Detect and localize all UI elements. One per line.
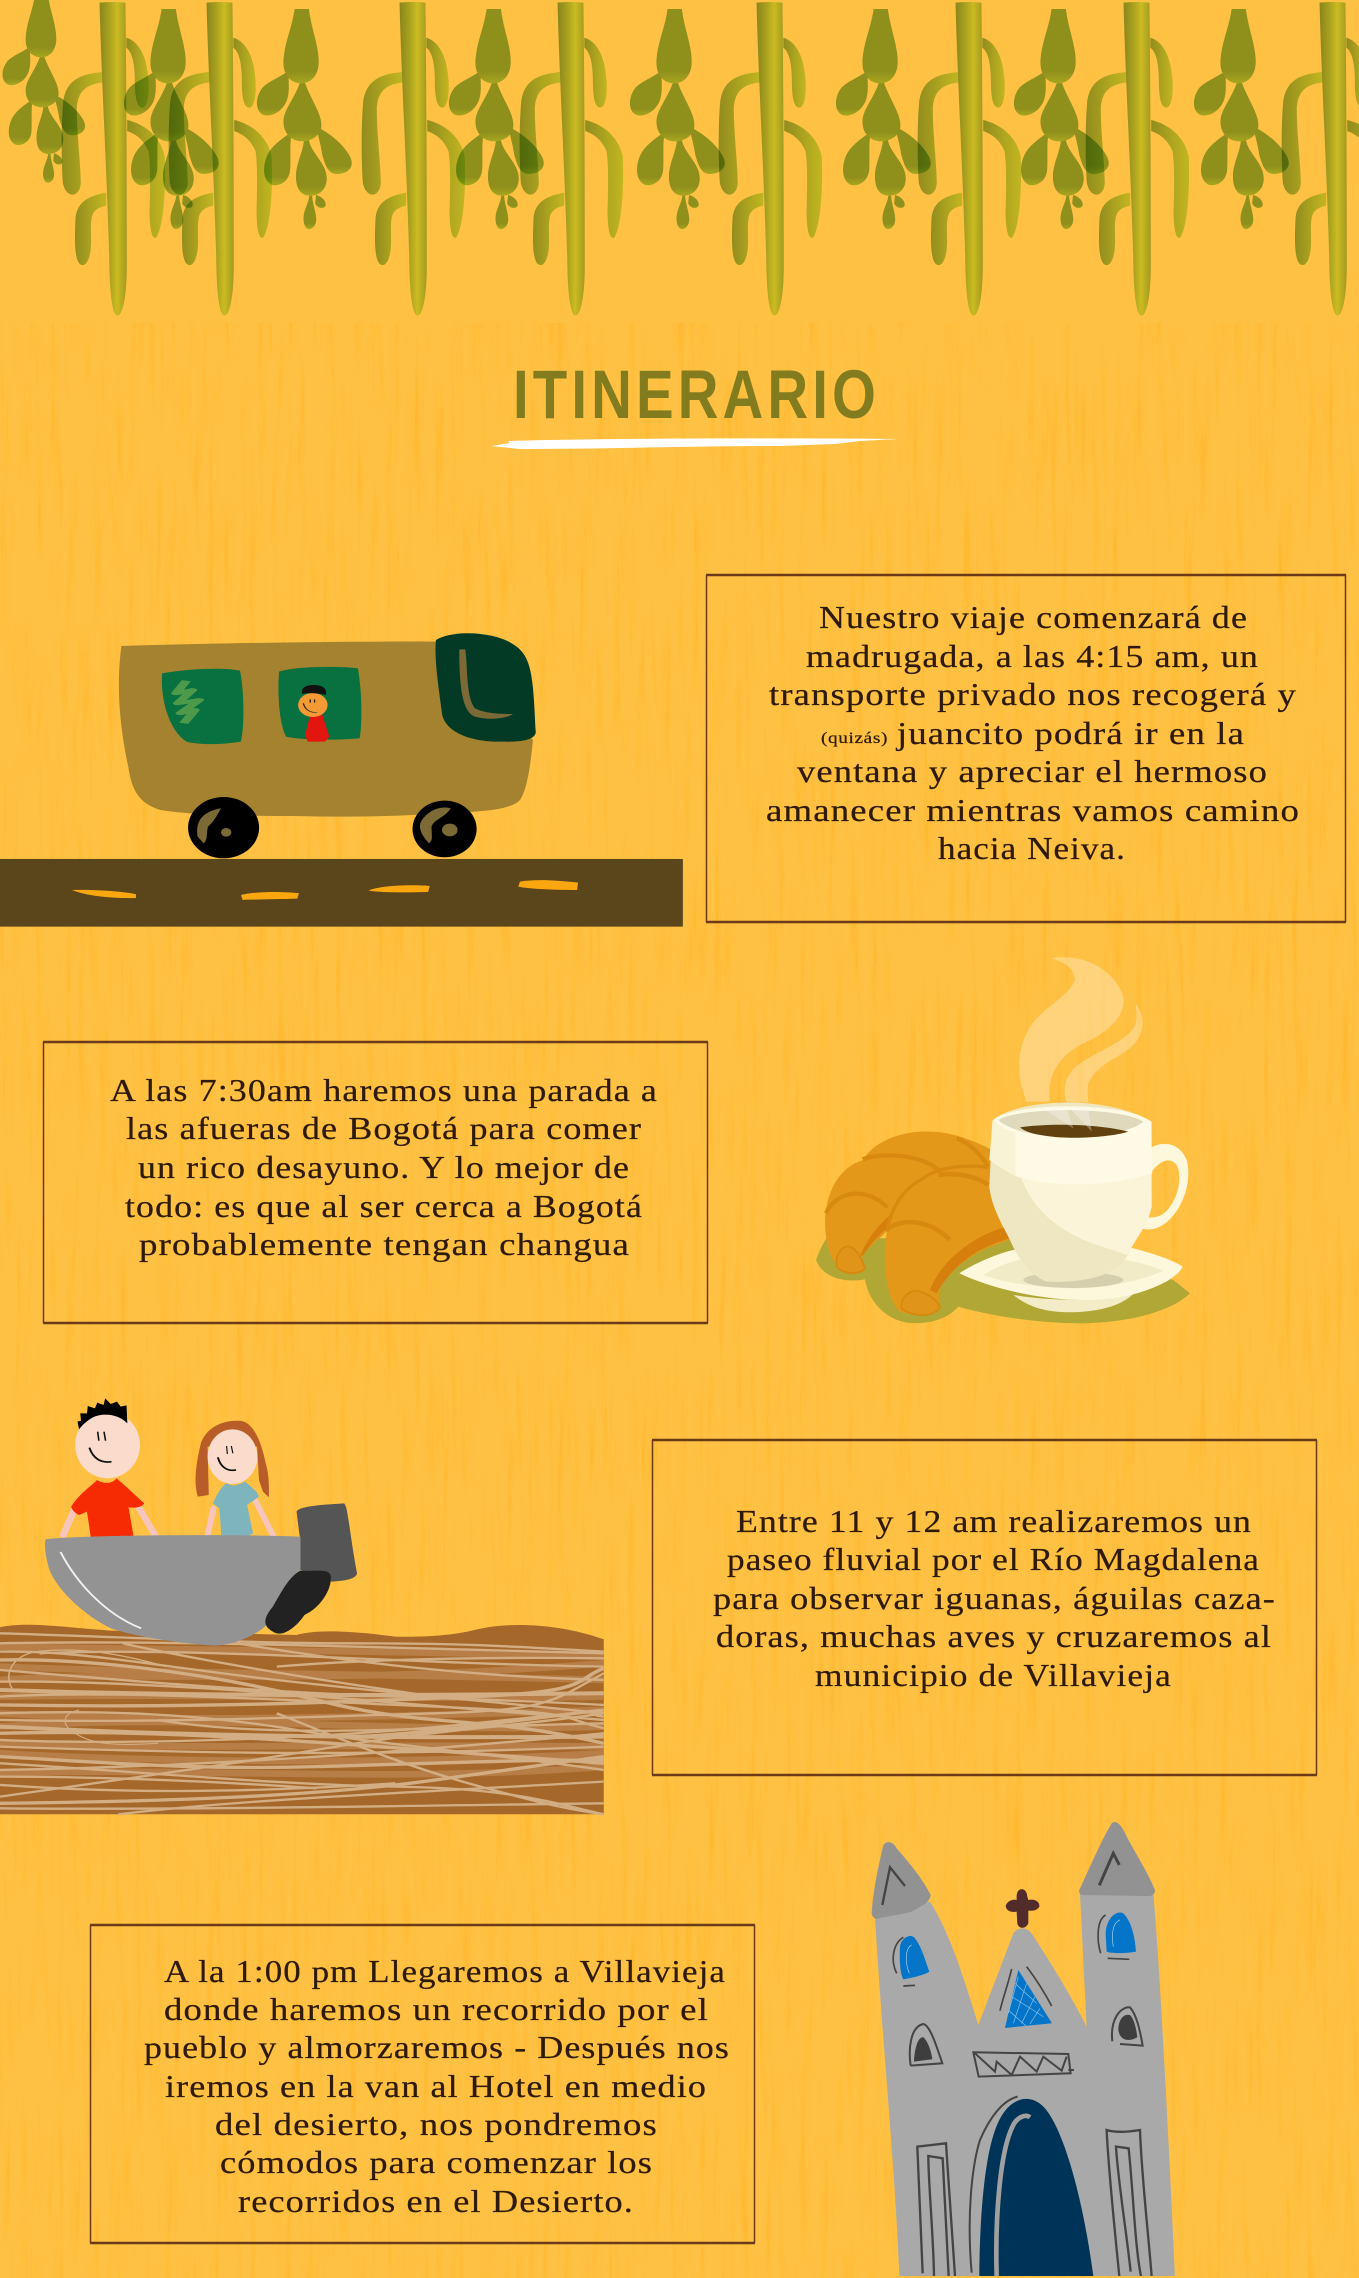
table shadow bbox=[816, 1238, 1190, 1323]
cactus column 3 bbox=[362, 2, 465, 316]
text panel: departure: madrugada, a las 4:15 am, un bbox=[806, 638, 1259, 674]
church facade bbox=[875, 1893, 1175, 2276]
front wheel bbox=[188, 797, 259, 858]
cactus column 6 bbox=[918, 2, 1021, 316]
text panel: Villavieja: del desierto, nos pondremos bbox=[215, 2106, 658, 2142]
text panel: river tour: paseo fluvial por el Río Magdalena bbox=[727, 1541, 1260, 1577]
right tower roof bbox=[1079, 1822, 1155, 1896]
steam bbox=[1019, 957, 1142, 1132]
prickly pear 6 bbox=[836, 9, 931, 229]
prickly pear 8 bbox=[1194, 9, 1289, 229]
text panel: breakfast: todo: es que al ser cerca a Bogotá bbox=[125, 1188, 643, 1224]
prickly pear 1 bbox=[3, 0, 85, 183]
right tower window bbox=[1098, 1912, 1136, 1959]
cactus column 5 bbox=[719, 2, 822, 316]
text panel: departure: (quizás) bbox=[821, 730, 888, 747]
cup bbox=[989, 1103, 1152, 1282]
cactus column 4 bbox=[520, 2, 623, 316]
prickly pear 5 bbox=[630, 9, 725, 229]
bus windscreen bbox=[436, 633, 536, 742]
text panel: river tour bbox=[652, 1440, 1317, 1775]
river bbox=[0, 1625, 604, 1814]
text panel: departure: amanecer mientras vamos camino bbox=[766, 792, 1300, 828]
back croissant bbox=[825, 1131, 992, 1273]
prickly pear 3 bbox=[257, 9, 352, 229]
rear wheel bbox=[413, 801, 477, 857]
bus body bbox=[119, 642, 533, 817]
right arched niche bbox=[1112, 2007, 1143, 2046]
text panel: departure: Nuestro viaje comenzará de bbox=[819, 599, 1248, 635]
text panel: river tour: doras, muchas aves y cruzaremos al bbox=[716, 1618, 1272, 1654]
illustration: coffee and croissants bbox=[816, 957, 1190, 1323]
bus window with scribble bbox=[162, 669, 243, 744]
text panel: Villavieja: iremos en la van al Hotel en medio bbox=[165, 2068, 707, 2104]
prickly pear 4 bbox=[449, 9, 544, 229]
text panel: river tour: municipio de Villavieja bbox=[815, 1657, 1172, 1693]
text panel: Villavieja: cómodos para comenzar los bbox=[220, 2144, 653, 2180]
prickly pear 2 bbox=[124, 9, 219, 229]
cactus column 2 bbox=[169, 2, 272, 316]
outboard motor bbox=[297, 1503, 357, 1582]
text panel: Villavieja: A la 1:00 pm Llegaremos a Villavieja bbox=[164, 1953, 726, 1989]
title: ITINERARIO bbox=[513, 356, 880, 433]
boat hull bbox=[45, 1535, 301, 1646]
text panel: breakfast: las afueras de Bogotá para comer bbox=[126, 1110, 642, 1146]
title underline brush stroke bbox=[491, 438, 898, 449]
text panel: river tour: para observar iguanas, águilas caza- bbox=[713, 1580, 1276, 1616]
saucer bbox=[959, 1247, 1183, 1312]
text panel: breakfast: A las 7:30am haremos una parada a bbox=[110, 1072, 658, 1108]
text panel: departure: transporte privado nos recogerá y bbox=[769, 676, 1297, 712]
front croissant bbox=[885, 1166, 1010, 1315]
zigzag frieze bbox=[973, 2052, 1074, 2077]
text panel: Villavieja bbox=[90, 1925, 755, 2243]
cactus border bbox=[3, 0, 1359, 316]
cactus column 8 bbox=[1282, 2, 1359, 316]
cross bbox=[1006, 1889, 1039, 1928]
girl bbox=[196, 1421, 273, 1537]
illustration: boat on river bbox=[0, 1398, 604, 1814]
road bbox=[0, 859, 683, 927]
left arched niche bbox=[910, 2024, 942, 2066]
propeller bbox=[265, 1571, 331, 1634]
text panel: departure: juancito podrá ir en la bbox=[896, 715, 1245, 751]
illustration: church bbox=[872, 1822, 1175, 2276]
left tower window bbox=[893, 1936, 929, 1986]
illustration: bus on road bbox=[0, 633, 683, 927]
boy bbox=[63, 1398, 155, 1538]
text panel: departure: ventana y apreciar el hermoso bbox=[797, 753, 1268, 789]
text panel: Villavieja: donde haremos un recorrido por el bbox=[164, 1991, 709, 2027]
text panel: river tour: Entre 11 y 12 am realizaremos un bbox=[736, 1503, 1252, 1539]
arched door bbox=[970, 2097, 1093, 2276]
bus window with passenger bbox=[278, 667, 361, 742]
prickly pear 7 bbox=[1014, 9, 1109, 229]
text panel: departure: hacia Neiva. bbox=[938, 830, 1126, 866]
text panel: departure bbox=[706, 575, 1346, 922]
text panel: breakfast bbox=[43, 1042, 708, 1323]
left tower roof bbox=[872, 1842, 931, 1919]
cactus column 7 bbox=[1086, 2, 1189, 316]
text panel: breakfast: un rico desayuno. Y lo mejor de bbox=[138, 1149, 630, 1185]
text panel: Villavieja: pueblo y almorzaremos - Después nos bbox=[144, 2029, 730, 2065]
text panel: Villavieja: recorridos en el Desierto. bbox=[238, 2183, 634, 2219]
cactus column 1 bbox=[62, 2, 165, 316]
centre gable window bbox=[1000, 1967, 1052, 2028]
right door panel bbox=[1107, 2130, 1152, 2276]
cup handle bbox=[1142, 1144, 1188, 1229]
left door panel bbox=[917, 2143, 955, 2276]
text panel: breakfast: probablemente tengan changua bbox=[139, 1226, 630, 1262]
